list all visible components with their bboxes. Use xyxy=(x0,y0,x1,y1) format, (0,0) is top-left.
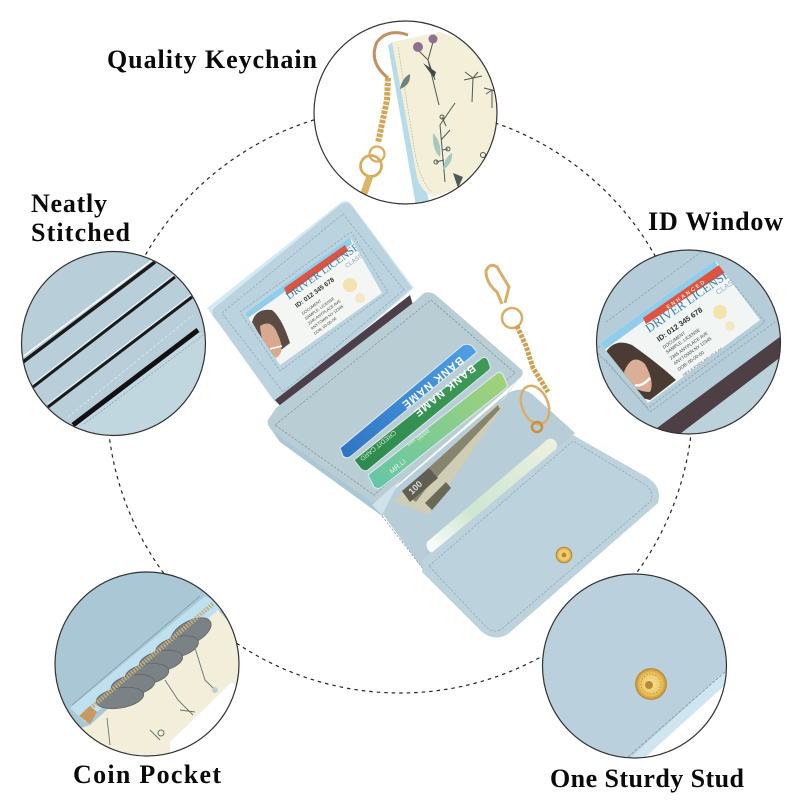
dashed connector ring xyxy=(107,107,693,693)
wallet inner card panel xyxy=(268,292,523,503)
coins xyxy=(96,617,212,710)
heading: One Sturdy Stud: One Sturdy Stud xyxy=(550,764,745,793)
card: blue bank card xyxy=(340,344,477,458)
card: teal card xyxy=(368,372,507,488)
ID card in window: 2345 ANYPLACE AVE xyxy=(307,298,342,326)
ID card in window: DRIVER LICENSE xyxy=(284,241,362,302)
pocket fold ribs xyxy=(372,374,522,515)
heading: Neatly Stitched xyxy=(31,189,131,247)
heading: Neatly Stitched: Neatly xyxy=(31,189,107,218)
banknotes xyxy=(393,403,503,515)
wallet top flap with ID window xyxy=(207,201,414,404)
lower compartment xyxy=(376,390,575,575)
card: teal card: MR.LI xyxy=(389,458,408,476)
detail circle: one sturdy stud xyxy=(542,573,728,759)
driver licence card: DOB: 00-00-00 xyxy=(677,350,705,372)
ID card in window: DOB: 00-00-00 xyxy=(313,315,338,336)
driver licence card xyxy=(600,260,739,400)
key ring and chain xyxy=(374,33,408,78)
driver licence card: ENHANCED xyxy=(666,279,708,311)
heading: Coin Pocket: Coin Pocket xyxy=(73,760,221,789)
card in front pocket xyxy=(427,439,557,553)
ID card in window: DOCUMENT xyxy=(301,298,323,316)
driver licence card: DRIVER LICENSE xyxy=(643,266,733,335)
detail circle: ID window xyxy=(595,244,790,440)
ID card in window: CLASS xyxy=(345,253,364,270)
gold stud xyxy=(636,668,666,700)
driver licence card: 2345 ANYPLACE AVE xyxy=(669,331,709,361)
heading: ID Window: ID Window xyxy=(648,207,783,236)
card: blue bank card: BANK NAME xyxy=(399,354,466,411)
card: green bank card xyxy=(354,357,490,471)
ID card in window: SAMPLE, LICENSE xyxy=(304,296,336,321)
driver licence card: CLASS xyxy=(714,275,739,297)
ID card in window: ID: 012 345 678 xyxy=(294,276,336,310)
front snap flap xyxy=(422,435,659,638)
driver licence card: SEX F EYES BR HT 5-06 xyxy=(682,346,724,378)
floral print xyxy=(418,42,498,182)
detail circle: neatly stitched xyxy=(20,250,206,436)
lower wallet back edge xyxy=(268,425,400,516)
detail circle: coin pocket xyxy=(54,571,240,757)
zipper teeth xyxy=(86,603,214,712)
ID card in window xyxy=(245,237,365,358)
dark lining band xyxy=(275,295,413,408)
card: teal card: **** 08/88 xyxy=(407,428,432,450)
detail circle: quality keychain xyxy=(314,21,505,206)
banknotes: 100 xyxy=(406,479,424,496)
ID card in window: ANYTOWN NY 12345 xyxy=(310,303,345,331)
keychain hook and chain xyxy=(486,265,555,432)
driver licence card: ID: 012 345 678 xyxy=(655,305,704,344)
zipper pull xyxy=(79,706,97,724)
card: green bank card: CREDIT CARD xyxy=(358,428,397,462)
driver licence card: SAMPLE, LICENSE xyxy=(665,327,701,355)
floral print xyxy=(107,648,215,745)
driver licence card: ANYTOWN NY 12345 xyxy=(673,336,713,366)
heading: Neatly Stitched: Stitched xyxy=(31,218,131,247)
driver licence card: DOCUMENT xyxy=(662,330,686,350)
snap stud xyxy=(556,547,572,563)
card: green bank card: BANK NAME xyxy=(411,362,478,419)
central wallet photo xyxy=(207,201,659,638)
heading: Quality Keychain: Quality Keychain xyxy=(107,45,318,74)
